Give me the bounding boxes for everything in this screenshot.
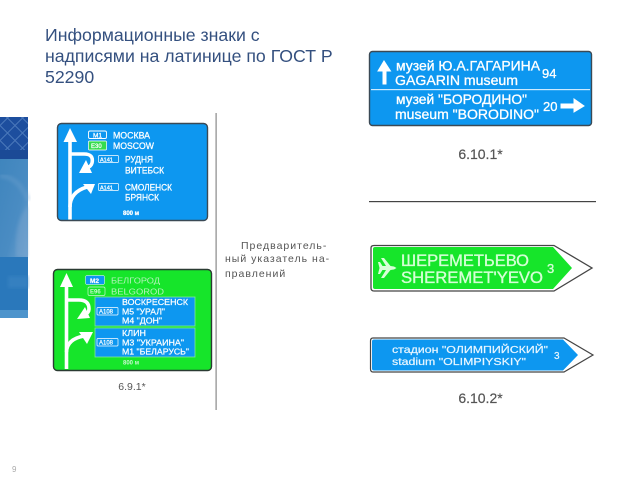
route and place labels: BELGOROD [111, 286, 164, 296]
sign labels: музей Ю.А.ГАГАРИНА [396, 58, 540, 74]
sign 6.10.2 Sheremetyevo [371, 246, 592, 291]
route and place labels: МОСКВА [113, 130, 150, 140]
sign 6.10.1 museum directions [370, 52, 592, 126]
sign labels [401, 252, 554, 287]
sign labels: музей "БОРОДИНО" [396, 92, 527, 107]
sign labels: 3 [547, 261, 554, 276]
route and place labels: M4 "ДОН" [122, 316, 162, 326]
route and place labels: СМОЛЕНСК [125, 182, 173, 192]
sign labels: ШЕРЕМЕТЬЕВО [401, 252, 529, 270]
sign labels: GAGARIN museum [395, 73, 518, 88]
sign labels [392, 343, 560, 368]
caption 6.10.1: 6.10.1* [458, 146, 503, 162]
icon: right arrow [561, 99, 584, 112]
route and place labels: M2 [90, 278, 99, 285]
route and place labels: 800 м [123, 360, 140, 366]
route and place labels: ВИТЕБСК [125, 166, 165, 176]
sign labels: 20 [543, 99, 557, 114]
icon: up arrow [378, 61, 390, 84]
sign labels: stadium "OLIMPIYSKIY" [392, 356, 526, 368]
icon: direction arrows [64, 128, 95, 220]
sign 6.9.1 blue advance direction sign [58, 124, 208, 220]
description text: ный указатель на- [225, 253, 330, 265]
description text: Предваритель- [241, 240, 327, 252]
route and place labels: A108 [99, 310, 114, 316]
route and place labels: E30 [91, 144, 102, 150]
route and place labels [86, 276, 189, 366]
icon: direction arrows [60, 273, 93, 369]
title: 52290 [45, 67, 94, 87]
route and place labels: A108 [99, 340, 114, 346]
route and place labels: КЛИН [122, 328, 146, 338]
decorative photo strip [0, 117, 28, 318]
route and place labels: БРЯНСК [125, 192, 160, 202]
sign 6.10.2 stadium [370, 338, 593, 372]
route and place labels: БЕЛГОРОД [111, 276, 160, 286]
route and place labels: РУДНЯ [125, 154, 153, 164]
sign labels [395, 58, 557, 122]
vertical divider [216, 113, 217, 410]
sign labels: стадион "ОЛИМПИЙСКИЙ" [392, 343, 548, 356]
route and place labels: A141 [100, 158, 113, 164]
page number: 9 [12, 465, 17, 474]
route and place labels: M1 [93, 132, 102, 140]
sign labels: 94 [542, 66, 556, 81]
sign 6.9.1 green advance direction sign [54, 270, 212, 370]
icon: airplane [378, 258, 396, 278]
sign labels: 3 [554, 351, 560, 362]
route and place labels: MOSCOW [113, 141, 154, 151]
title: Информационные знаки с [45, 25, 260, 45]
route and place labels: M5 "УРАЛ" [122, 306, 165, 316]
sign labels: museum "BORODINO" [395, 107, 539, 122]
route and place labels: E96 [90, 290, 101, 296]
route and place labels: M1 "БЕЛАРУСЬ" [122, 346, 189, 356]
blue panels with route labels [95, 297, 195, 357]
sign labels: SHEREMET'YEVO [401, 269, 543, 287]
description text: правлений [225, 268, 286, 280]
title: надписями на латинице по ГОСТ Р [45, 46, 333, 66]
route and place labels: 800 м [123, 211, 140, 217]
caption 6.9.1: 6.9.1* [118, 381, 146, 393]
route and place labels [88, 130, 173, 217]
horizontal divider [369, 201, 596, 202]
route and place labels: M3 "УКРАИНА" [122, 338, 184, 348]
route and place labels: ВОСКРЕСЕНСК [122, 297, 188, 307]
route and place labels: A141 [100, 186, 113, 192]
caption 6.10.2: 6.10.2* [458, 390, 503, 406]
